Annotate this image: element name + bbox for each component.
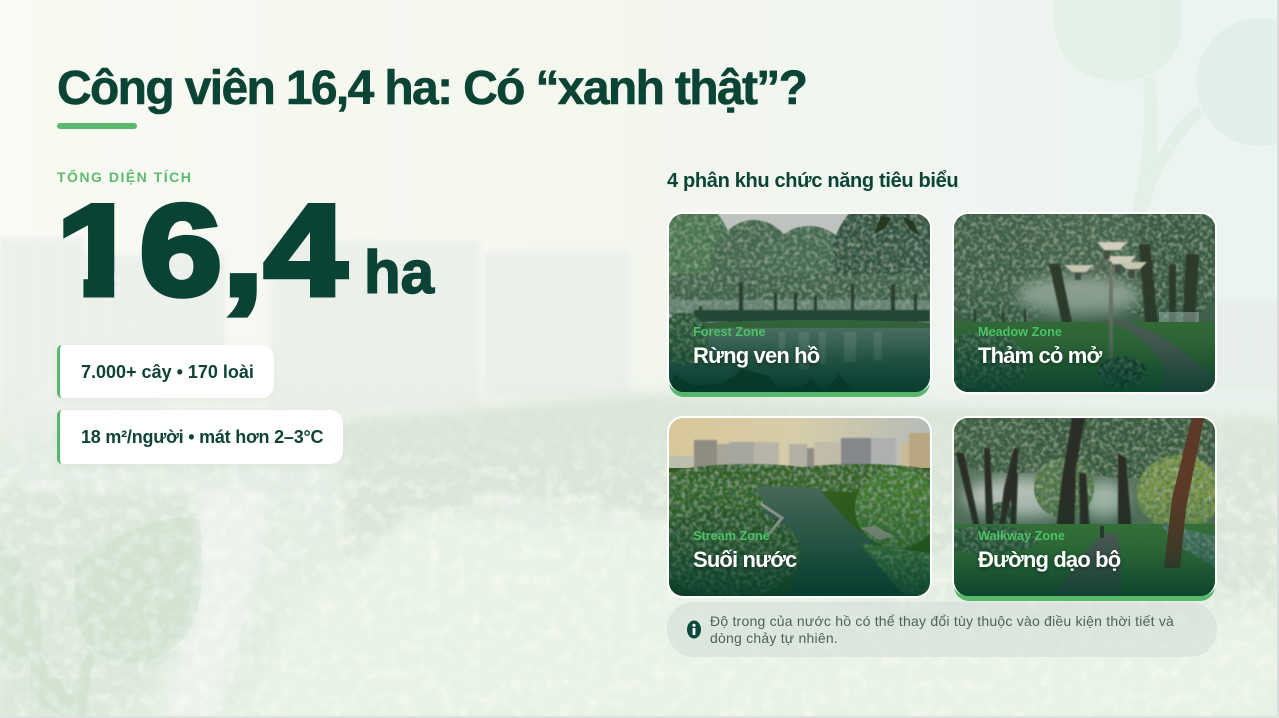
stat label: TỔNG DIỆN TÍCH <box>57 169 192 185</box>
icon: info <box>687 620 701 638</box>
photo: tree-lined walkway <box>954 418 1215 596</box>
zone name: Suối nước <box>693 547 796 572</box>
callout: water clarity note <box>667 602 1217 657</box>
background tree canopy <box>0 370 1279 718</box>
photo: aerial stream with apartments <box>669 418 930 596</box>
photo: meadow with lamp post <box>954 214 1215 392</box>
stat pill: trees and species <box>57 345 274 398</box>
stat pill: area per person and cooling <box>57 410 343 464</box>
photo: lakeside forest <box>669 214 930 392</box>
big number: total area: 6,4 <box>139 177 347 323</box>
zone label: Walkway Zone <box>978 529 1065 543</box>
zone name: Thảm cỏ mở <box>978 343 1101 368</box>
big number: total area: 1 <box>56 177 139 323</box>
zone name: Rừng ven hồ <box>693 343 819 368</box>
green base: walkway card <box>954 571 1215 601</box>
stat pill: trees and species: 7.000+ cây • 170 loài <box>81 362 254 382</box>
unit: ha: ha <box>364 239 434 306</box>
zone name: Đường dạo bộ <box>978 547 1120 572</box>
zone label: Stream Zone <box>693 529 770 543</box>
zone label: Meadow Zone <box>978 325 1062 339</box>
panel: meadow zone card <box>952 212 1217 394</box>
green base: forest card <box>669 367 930 397</box>
decoration: faint plant top-right <box>1054 0 1279 212</box>
zones heading: 4 phân khu chức năng tiêu biểu <box>667 170 958 192</box>
decoration: faint plant bottom-left <box>0 517 202 718</box>
stat pill: area per person and cooling: 18 m²/người • mát hơn 2–3°C <box>81 427 323 447</box>
zone label: Forest Zone <box>693 325 766 339</box>
title: Công viên 16,4 ha: Có “xanh thật”? <box>57 62 806 115</box>
panel: stream zone card <box>667 416 932 598</box>
note text: Độ trong của nước hồ có thể thay đổi tùy thuộc vào điều kiện thời tiết và dòng chảy tự nhiên. <box>710 613 1174 646</box>
panel: forest zone card <box>667 212 932 392</box>
panel: walkway zone card <box>952 416 1217 596</box>
title underline accent <box>57 123 137 129</box>
